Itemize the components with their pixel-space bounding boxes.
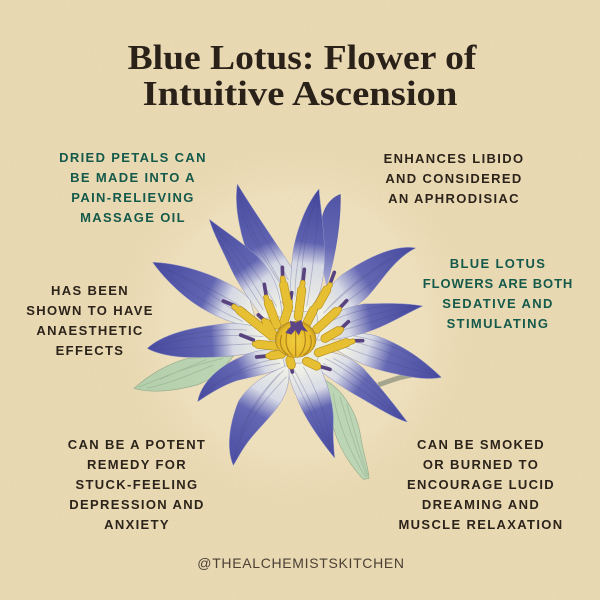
bottom sepal leaf <box>325 380 369 479</box>
petal lower left <box>198 350 285 402</box>
white petal underlay <box>259 302 332 375</box>
petal behind top <box>321 194 341 287</box>
text: enhances libido <box>384 151 524 206</box>
text: smoked or burned: ENCOURAGE LUCID <box>407 477 555 492</box>
text: sedative and stimulating: BLUE LOTUS <box>450 256 546 271</box>
text: depression remedy: CAN BE A POTENT <box>68 437 206 452</box>
petal top <box>291 189 325 312</box>
title: Blue Lotus: Flower of <box>128 38 476 77</box>
text: anaesthetic effects: EFFECTS <box>56 343 124 358</box>
petal upper left <box>209 219 282 318</box>
text: depression remedy: REMEDY FOR <box>87 457 187 472</box>
petal upper right <box>317 247 416 325</box>
text: sedative and stimulating: SEDATIVE AND <box>442 296 554 311</box>
title <box>128 38 477 112</box>
petal far left <box>147 323 272 357</box>
text: sedative and stimulating: FLOWERS ARE BOTH <box>423 276 573 291</box>
text: enhances libido: AND CONSIDERED <box>385 171 523 186</box>
text: dried petals: DRIED PETALS CAN <box>59 150 207 165</box>
text: sedative and stimulating: STIMULATING <box>447 316 549 331</box>
text: anaesthetic effects: SHOWN TO HAVE <box>26 303 154 318</box>
text: depression remedy: STUCK-FEELING <box>76 477 198 492</box>
text: depression remedy <box>68 437 206 532</box>
text: anaesthetic effects: ANAESTHETIC <box>36 323 144 338</box>
petal top left <box>236 184 292 310</box>
flower illustration <box>134 184 441 479</box>
petal left <box>153 262 258 329</box>
text: sedative and stimulating <box>423 256 573 331</box>
petal right upper <box>317 303 423 340</box>
text: smoked or burned: OR BURNED TO <box>423 457 539 472</box>
text: smoked or burned <box>398 437 564 532</box>
text: smoked or burned: CAN BE SMOKED <box>417 437 545 452</box>
text: anaesthetic effects <box>26 283 154 358</box>
title: Intuitive Ascension <box>143 74 457 112</box>
center bud <box>275 320 316 357</box>
stamens <box>223 267 363 372</box>
text: dried petals: BE MADE INTO A <box>70 170 196 185</box>
petal lower right <box>315 352 407 422</box>
text: dried petals: PAIN-RELIEVING <box>71 190 195 205</box>
left sepal leaf <box>134 356 233 391</box>
text: dried petals <box>59 150 207 225</box>
petal right <box>337 333 441 379</box>
petal bottom left <box>229 365 289 465</box>
footer handle: @THEALCHEMISTSKITCHEN <box>197 555 405 571</box>
petal bottom <box>287 363 335 458</box>
text: smoked or burned: DREAMING AND <box>422 497 540 512</box>
text: anaesthetic effects: HAS BEEN <box>51 283 129 298</box>
text: depression remedy: ANXIETY <box>104 517 170 532</box>
text: dried petals: MASSAGE OIL <box>80 210 186 225</box>
stem <box>378 374 422 385</box>
text: smoked or burned: MUSCLE RELAXATION <box>398 517 564 532</box>
text: enhances libido: ENHANCES LIBIDO <box>384 151 524 166</box>
text: depression remedy: DEPRESSION AND <box>69 497 205 512</box>
text: enhances libido: AN APHRODISIAC <box>388 191 520 206</box>
